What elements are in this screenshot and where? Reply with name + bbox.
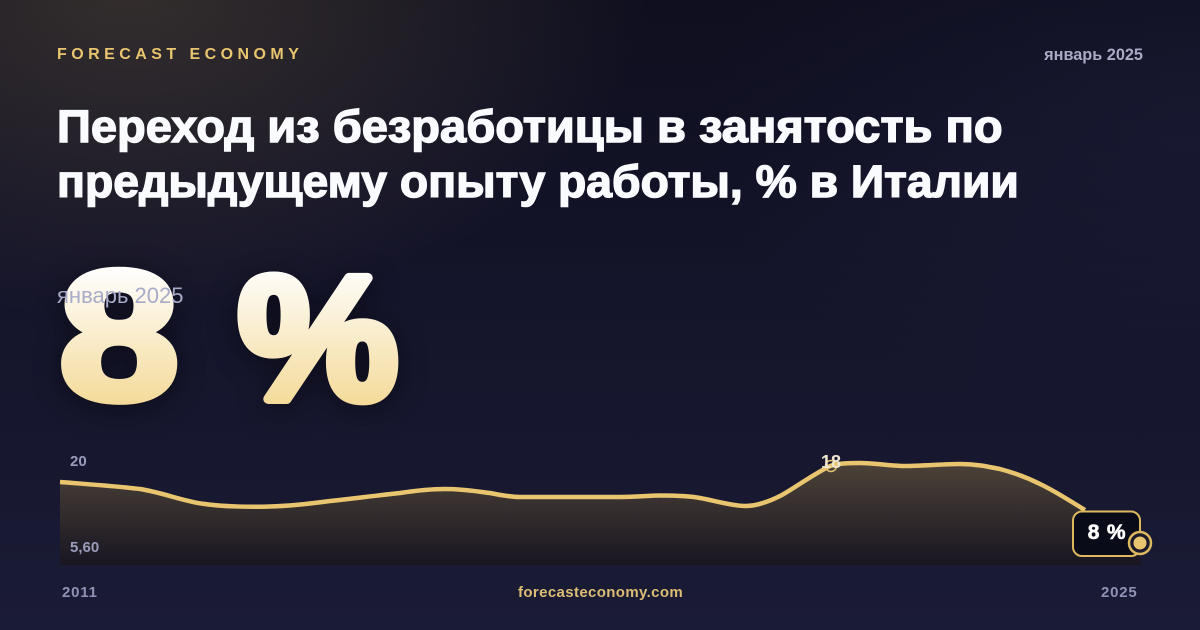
big value 8 %: 8 (59, 234, 179, 438)
x axis end: 2025 (1101, 584, 1138, 601)
area fill (60, 463, 1141, 565)
brand label: FORECAST ECONOMY (57, 46, 303, 63)
date top right: январь 2025 (1044, 46, 1143, 64)
big value 8 %: % (238, 241, 398, 437)
axis min: 5,60 (70, 539, 99, 556)
source url: forecasteconomy.com (518, 584, 683, 601)
value date label: январь 2025 (57, 283, 184, 308)
end marker (1129, 532, 1151, 554)
peak label: 18 (821, 452, 841, 472)
x axis start: 2011 (62, 584, 98, 601)
trend line (60, 463, 1085, 510)
title: Переход из безработицы в занятость по (57, 101, 1003, 152)
badge value: 8 % (1088, 521, 1126, 544)
peak marker (826, 460, 836, 472)
title (57, 101, 1019, 208)
title: предыдущему опыту работы, % в Италии (57, 156, 1019, 207)
current value badge (1073, 512, 1140, 556)
axis max: 20 (70, 453, 87, 470)
